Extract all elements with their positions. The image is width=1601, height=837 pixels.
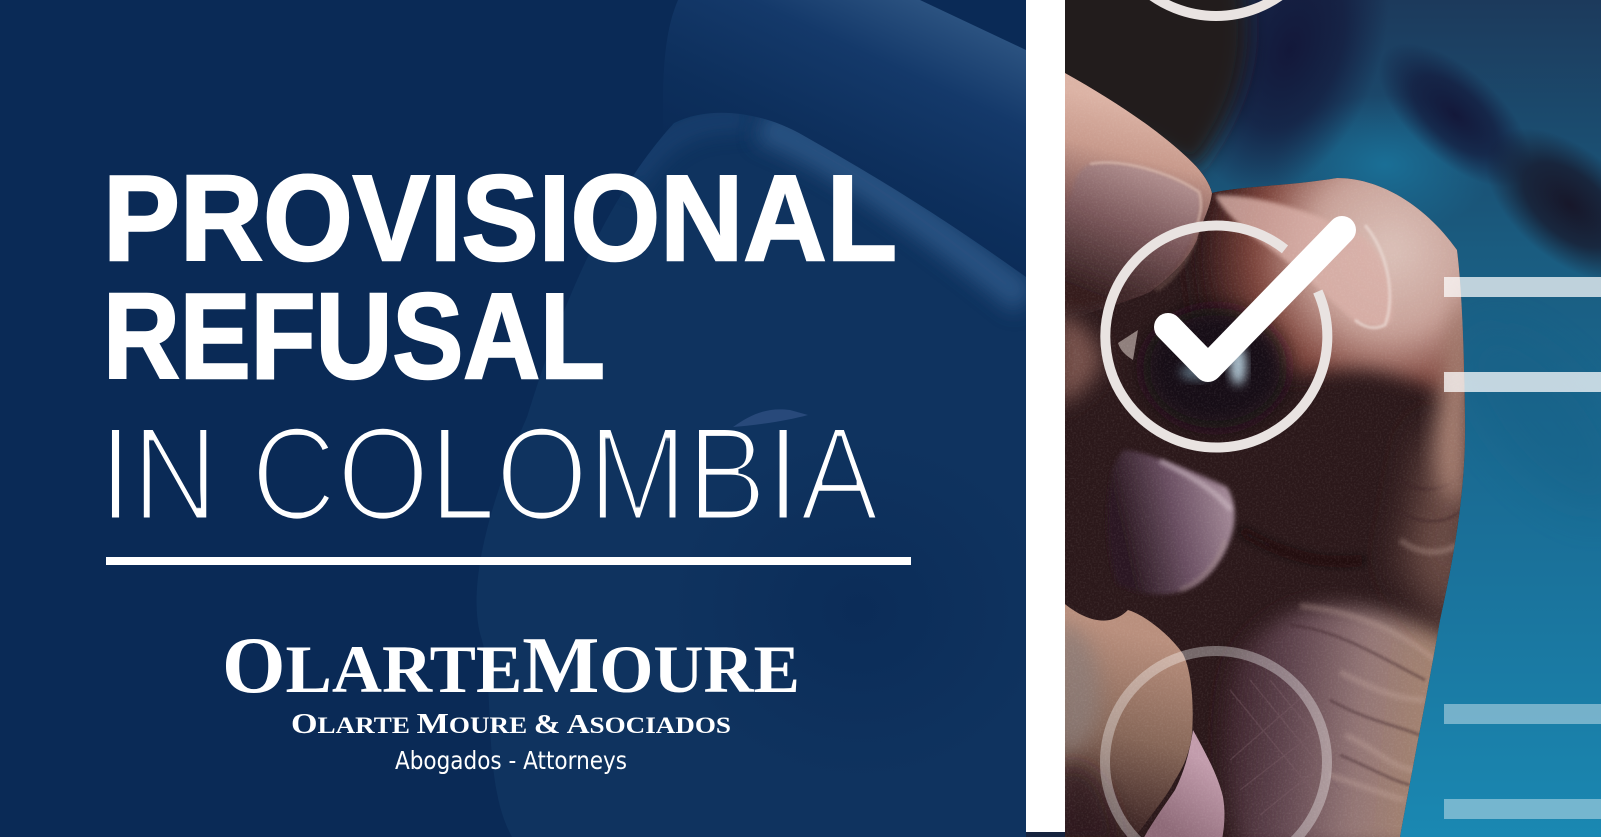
title: IN COLOMBIA — [99, 400, 879, 548]
icon: check circle — [1105, 226, 1342, 448]
logo: Olarte Moure: Abogados - Attorneys — [395, 746, 627, 775]
ring — [1105, 226, 1327, 448]
lens: dark center — [1143, 308, 1287, 428]
lower finger — [1055, 600, 1224, 837]
list line: first lower — [1444, 704, 1601, 724]
icon: bottom circle — [1105, 651, 1327, 837]
photo: hand — [1065, 73, 1466, 837]
title: REFUSAL — [103, 268, 605, 404]
thumb — [1198, 168, 1465, 400]
logo: Olarte Moure — [222, 622, 800, 775]
panel: navy background with ghosted hand — [477, 0, 1026, 837]
divider rule — [106, 557, 911, 565]
list line: first upper — [1444, 277, 1601, 297]
second fingernail — [1107, 450, 1235, 595]
index finger — [1060, 70, 1212, 322]
icon: top circle — [1105, 0, 1327, 16]
palm: wrinkled skin — [1224, 430, 1480, 837]
panel: photo background — [1040, 0, 1601, 837]
logo: Olarte Moure: OLARTE MOURE & A SOCIADOS — [291, 708, 731, 740]
skin texture — [1065, 154, 1464, 837]
logo: Olarte Moure: OLARTEMOURE — [222, 622, 800, 710]
ghost: small highlight — [733, 409, 808, 427]
thumbnail — [1215, 195, 1393, 326]
title: PROVISIONAL — [103, 150, 897, 286]
list line: second lower — [1444, 799, 1601, 819]
white vertical bar — [1026, 0, 1065, 832]
middle fingertip at left — [1055, 313, 1102, 405]
title — [99, 150, 897, 548]
list line: second upper — [1444, 372, 1601, 392]
ghost: lower finger and hand — [477, 113, 1026, 837]
check mark — [1168, 230, 1342, 368]
ghost: upper finger — [666, 0, 1026, 218]
